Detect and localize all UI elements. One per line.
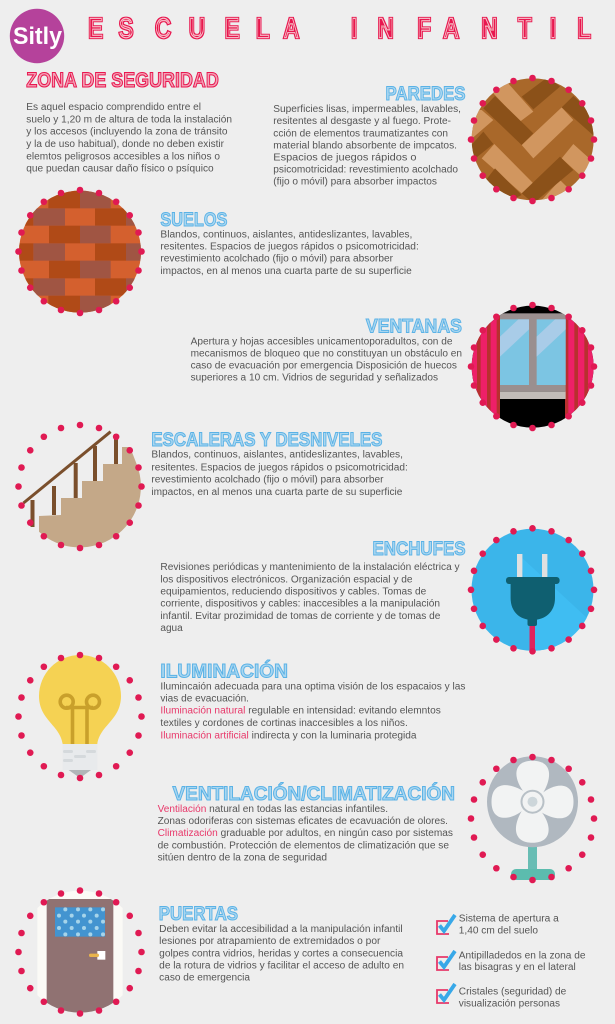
logo: Sitly: Sitly bbox=[13, 23, 63, 50]
text: ventilación: Zonas odoriferas con sistemas eficates de ecavuación de olores. bbox=[158, 816, 448, 827]
check item 1 bbox=[437, 913, 559, 937]
text: paredes: cción de elementos traumatizantes con bbox=[273, 128, 448, 139]
panel: paredes bbox=[273, 70, 600, 210]
text: iluminación: vias de evacuación. bbox=[160, 693, 249, 704]
text: puertas: golpes contra vidrios, heridas y cortes a consecuencia bbox=[159, 948, 403, 959]
panel: suelos bbox=[10, 185, 419, 320]
check item 1: 1,40 cm del suelo bbox=[459, 926, 538, 937]
heading: iluminación: ILUMINACIÓN bbox=[160, 658, 288, 682]
text: ventilación: Ventilación natural en todas las estancias infantiles. bbox=[158, 804, 388, 815]
text: puertas bbox=[159, 924, 404, 984]
heading: suelos: SUELOS bbox=[160, 209, 227, 231]
text: suelos: impactos, en al menos una cuarta parte de su superficie bbox=[160, 266, 412, 277]
text: zona de seguridad: que puedan causar daño físico o psíquico bbox=[26, 163, 214, 174]
text: ventanas: caso de evacuación por emergencia Disposición de huecos bbox=[191, 361, 457, 372]
text: puertas: lesiones por atrapamiento de extremidados o por bbox=[159, 936, 381, 947]
text: ventanas bbox=[191, 337, 462, 384]
text: paredes: (fijo o móvil) para absorber impactos bbox=[273, 177, 437, 188]
text: zona de seguridad: suelo y 1,20 m de altura de toda la instalación bbox=[26, 114, 232, 125]
text: iluminación: Ilumincaión adecuada para una optima visión de los espacaios y las bbox=[160, 681, 466, 692]
text: suelos bbox=[160, 229, 419, 277]
icon: light bulb bbox=[15, 652, 145, 781]
text: zona de seguridad: y la de uso habitual), donde no deben existir bbox=[26, 139, 225, 150]
text: puertas: Deben evitar la accesibilidad a la manipulación infantil bbox=[159, 924, 403, 935]
title: ESCUELA INFANTIL bbox=[88, 11, 591, 45]
text: escaleras: revestimiento acolchado (fijo o móvil) para absorber bbox=[151, 474, 384, 485]
text: puertas: de la rotura de vidrios y facilitar el acceso de adulto en bbox=[159, 960, 404, 971]
text: ventilación: Climatización graduable por adultos, en ningún caso por sistemas bbox=[158, 828, 453, 839]
panel: ventilación/climatización bbox=[158, 754, 597, 883]
text: zona de seguridad: elemtos peligrosos accesibles a los niños o bbox=[26, 151, 220, 162]
check item 1: Sistema de apertura a bbox=[459, 913, 559, 924]
text: paredes: psicomotricidad: revestimiento acolchado bbox=[273, 165, 458, 176]
check item 3: Cristales (seguridad) de bbox=[459, 986, 567, 997]
panel: iluminación bbox=[15, 652, 466, 781]
text: escaleras: resitentes. Espacios de juegos rápidos o psicomotricidad: bbox=[151, 462, 408, 473]
check item 2: Antipilladedos en la zona de bbox=[459, 950, 586, 961]
icon: bricks bbox=[15, 186, 145, 316]
panel: puertas bbox=[15, 885, 404, 1020]
icon: staircase bbox=[15, 422, 145, 551]
text: paredes: Superficies lisas, impermeables, lavables, bbox=[273, 104, 461, 115]
text: suelos: resitentes. Espacios de juegos rápidos o psicomotricidad: bbox=[160, 242, 419, 253]
text: zona de seguridad: y los accesos (incluyendo la zona de tránsito bbox=[26, 127, 228, 138]
check item 2: las bisagras y en el lateral bbox=[459, 962, 576, 973]
panel: ventanas bbox=[191, 300, 600, 435]
heading: enchufes: ENCHUFES bbox=[372, 538, 466, 560]
icon: parquet bbox=[468, 74, 598, 204]
icon: door bbox=[15, 885, 145, 1020]
text: enchufes: equipamientos, reduciendo dispositivos y cables. Tomas de bbox=[160, 586, 427, 597]
text: iluminación: textiles y cordones de cortinas inaccesibles a los niños. bbox=[160, 718, 408, 729]
heading: escaleras y desniveles: ESCALERAS Y DESNIVELES bbox=[151, 429, 382, 451]
heading: ventanas: VENTANAS bbox=[366, 316, 462, 338]
text: enchufes: agua bbox=[160, 623, 183, 634]
text: ventanas: Apertura y hojas accesibles unicamentoporadultos, con de bbox=[191, 337, 453, 348]
heading: paredes: PAREDES bbox=[386, 83, 466, 105]
icon: fan bbox=[468, 754, 597, 883]
text: escaleras: Blandos, continuos, aislantes, antideslizantes, lavables, bbox=[151, 450, 403, 461]
text: paredes bbox=[273, 104, 461, 188]
text: ventanas: mecanismos de bloqueo que no constituyan un obstáculo en bbox=[191, 349, 462, 360]
text: enchufes: Revisiones periódicas y mantenimiento de la instalación eléctrica y bbox=[160, 562, 460, 573]
text: iluminación: Iluminación natural regulable en intensidad: evitando elemntos bbox=[160, 706, 441, 717]
check item 2 bbox=[437, 950, 586, 973]
check item 3: visualización personas bbox=[459, 999, 560, 1010]
text: iluminación: Iluminación artificial indirecta y con la luminaria protegida bbox=[160, 730, 417, 741]
text: ventilación bbox=[158, 804, 453, 864]
text: enchufes: corriente, dispositivos y cables: inaccesibles a la manipulación bbox=[160, 599, 440, 610]
heading: puertas: PUERTAS bbox=[159, 903, 238, 925]
panel: escaleras y desniveles bbox=[15, 422, 408, 551]
text: paredes: Espacios de juegos rápidos o bbox=[273, 152, 417, 163]
text: suelos: revestimiento acolchado (fijo o móvil) para absorber bbox=[160, 254, 394, 265]
panel: zona de seguridad bbox=[26, 69, 232, 174]
icon: window with curtains bbox=[465, 300, 600, 435]
heading: ventilación/climatización: VENTILACIÓN/CLIMATIZACIÓN bbox=[172, 781, 455, 805]
text: enchufes: los dispositivos electrónicos. Organización espacial y de bbox=[160, 574, 413, 585]
check item 3 bbox=[437, 984, 567, 1010]
text: paredes: material blando absorbente de impcatos. bbox=[273, 140, 457, 151]
text: ventilación: de combustión. Protección de elementos de climatización que se bbox=[158, 840, 449, 851]
text: enchufes: infantil. Evitar prozimidad de tomas de corriente y de tomas de bbox=[160, 611, 441, 622]
text: ventilación: sitúen dentro de la zona de seguridad bbox=[158, 853, 327, 864]
text: zona de seguridad: Es aquel espacio comprendido entre el bbox=[26, 102, 201, 113]
panel: enchufes bbox=[160, 525, 600, 660]
text: escaleras: impactos, en al menos una cuarta parte de su superficie bbox=[151, 487, 403, 498]
logo: Sitly bbox=[10, 9, 64, 63]
text: ventanas: superiores a 10 cm. Vidrios de seguridad y señalizados bbox=[191, 373, 438, 384]
text: escaleras bbox=[151, 450, 408, 498]
text: suelos: Blandos, continuos, aislantes, antideslizantes, lavables, bbox=[160, 229, 412, 240]
text: zona de seguridad bbox=[26, 102, 232, 174]
panel: checklist bbox=[437, 913, 586, 1010]
text: enchufes bbox=[160, 562, 460, 634]
icon: plug bbox=[468, 525, 600, 660]
text: paredes: resitentes al desgaste y al fuego. Prote- bbox=[273, 116, 451, 127]
text: puertas: caso de emergencia bbox=[159, 973, 250, 984]
heading: zona de seguridad: ZONA DE SEGURIDAD bbox=[26, 69, 219, 92]
text: iluminación bbox=[160, 681, 466, 741]
